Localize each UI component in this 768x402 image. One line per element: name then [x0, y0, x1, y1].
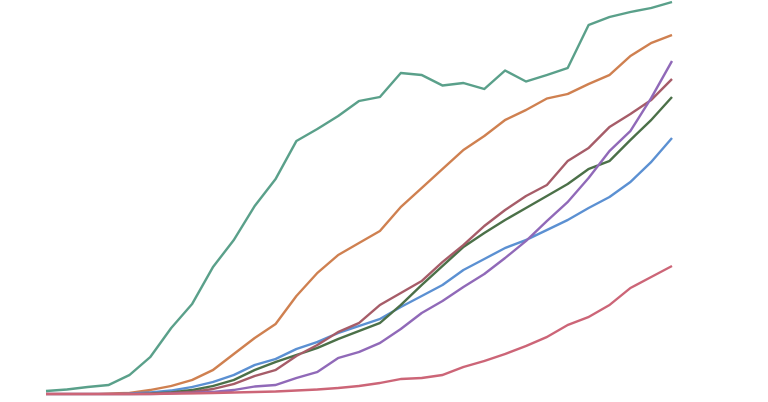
line: blue series	[46, 138, 672, 394]
line: teal series	[46, 2, 672, 391]
line: pink series	[46, 266, 672, 394]
line: maroon series	[46, 79, 672, 394]
line: dark green series	[46, 97, 672, 394]
line: orange series	[46, 35, 672, 394]
line: purple series	[46, 61, 672, 394]
